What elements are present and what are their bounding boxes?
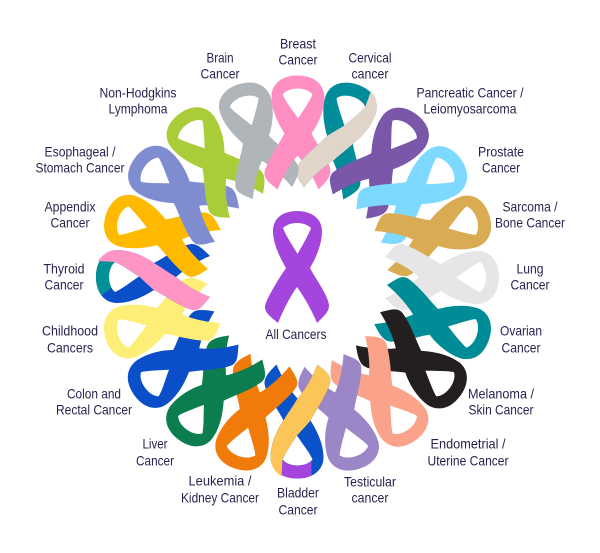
label: endometrial cancer: Uterine Cancer: [428, 452, 509, 468]
label: bladder cancer: [277, 484, 319, 517]
label: esophageal cancer: [36, 143, 125, 175]
label: appendix cancer: Appendix: [44, 198, 96, 214]
label: esophageal cancer: Esophageal /: [44, 143, 116, 159]
label: pancreatic cancer: Leiomyosarcoma: [424, 100, 517, 116]
icon: breast ribbon left tail overlap: [264, 76, 298, 190]
label: non-hodgkins lymphoma: Non-Hodgkins: [100, 84, 176, 100]
label: non-hodgkins lymphoma: Lymphoma: [108, 100, 168, 116]
label: bladder cancer: Cancer: [278, 501, 318, 517]
label: childhood cancers: Childhood: [42, 322, 98, 338]
label: thyroid cancer: Thyroid: [44, 260, 84, 276]
label: breast cancer: Cancer: [278, 51, 318, 67]
icon: leukemia ribbon: [204, 350, 302, 479]
icon: breast cancer ribbon: [264, 76, 330, 190]
label: colon cancer: [56, 385, 132, 417]
label: sarcoma: Sarcoma /: [502, 198, 558, 214]
label: brain cancer: [200, 49, 240, 81]
label: appendix cancer: Cancer: [50, 214, 90, 230]
label: prostate cancer: Prostate: [478, 143, 524, 159]
label: sarcoma: [495, 198, 565, 230]
icon: colon cancer ribbon: [115, 302, 246, 422]
icon: appendix cancer ribbon: [96, 183, 224, 281]
label: pancreatic cancer: [416, 84, 524, 116]
label: testicular cancer: cancer: [352, 489, 389, 505]
label: cervical cancer: cancer: [352, 65, 389, 81]
label: cervical cancer: Cervical: [348, 49, 392, 65]
label: sarcoma: Bone Cancer: [495, 214, 565, 230]
label: all cancers: All Cancers: [266, 326, 326, 342]
icon: ovarian cancer ribbon: [371, 273, 499, 371]
label: bladder cancer: Bladder: [277, 484, 319, 500]
label: prostate cancer: [478, 143, 524, 175]
label: childhood cancers: [42, 322, 98, 355]
label: esophageal cancer: Stomach Cancer: [36, 159, 125, 175]
label: leukemia: [181, 472, 259, 505]
label: lung cancer: [510, 260, 550, 292]
label: melanoma: Skin Cancer: [468, 401, 534, 417]
icon: non-hodgkins lymphoma ribbon: [152, 95, 273, 226]
label: leukemia: Kidney Cancer: [181, 489, 259, 505]
icon: liver cancer ribbon: [152, 328, 273, 459]
icon: testicular cancer ribbon: [293, 350, 391, 479]
label: endometrial cancer: Endometrial /: [430, 435, 506, 451]
label: leukemia: Leukemia /: [188, 472, 252, 488]
label: testicular cancer: Testicular: [344, 473, 396, 489]
label: melanoma: Melanoma /: [468, 385, 534, 401]
label: non-hodgkins lymphoma: [100, 84, 176, 116]
icon: prostate cancer ribbon: [349, 132, 480, 252]
label: liver cancer: [136, 435, 174, 468]
icon: all cancers ribbon: [265, 211, 329, 323]
label: colon cancer: Colon and: [67, 385, 121, 401]
icon: pancreatic cancer ribbon: [322, 95, 443, 226]
icon: lung cancer ribbon: [385, 244, 499, 310]
label: colon cancer: Rectal Cancer: [56, 401, 132, 417]
icon: brain cancer ribbon: [207, 75, 303, 203]
icon: melanoma ribbon: [349, 302, 480, 422]
label: breast cancer: [278, 35, 318, 67]
icon: childhood cancer ribbon: [96, 273, 224, 371]
label: brain cancer: Brain: [206, 49, 234, 65]
icon: bladder cancer ribbon: [264, 364, 330, 478]
label: cervical cancer: [348, 49, 392, 81]
label: appendix cancer: [44, 198, 96, 230]
label: breast cancer: Breast: [280, 35, 316, 51]
label: endometrial cancer: [428, 435, 509, 468]
icon: thyroid cancer ribbon: [96, 244, 210, 310]
label: melanoma: [468, 385, 534, 417]
label: liver cancer: Cancer: [136, 452, 174, 468]
label: ovarian cancer: Cancer: [502, 339, 541, 355]
label: lung cancer: Cancer: [510, 276, 550, 292]
label: prostate cancer: Cancer: [482, 159, 520, 175]
icon: endometrial cancer ribbon: [322, 328, 443, 459]
icon: sarcoma ribbon: [371, 183, 499, 281]
label: thyroid cancer: Cancer: [44, 276, 84, 292]
label: thyroid cancer: [44, 260, 84, 292]
icon: cervical cancer ribbon: [292, 75, 388, 203]
label: ovarian cancer: [500, 322, 542, 355]
label: liver cancer: Liver: [142, 435, 168, 451]
label: lung cancer: Lung: [516, 260, 544, 276]
label: childhood cancers: Cancers: [47, 339, 93, 355]
label: pancreatic cancer: Pancreatic Cancer /: [416, 84, 524, 100]
icon: esophageal cancer ribbon: [115, 132, 246, 252]
label: ovarian cancer: Ovarian: [500, 322, 542, 338]
label: testicular cancer: [344, 473, 396, 505]
label: brain cancer: Cancer: [200, 65, 240, 81]
